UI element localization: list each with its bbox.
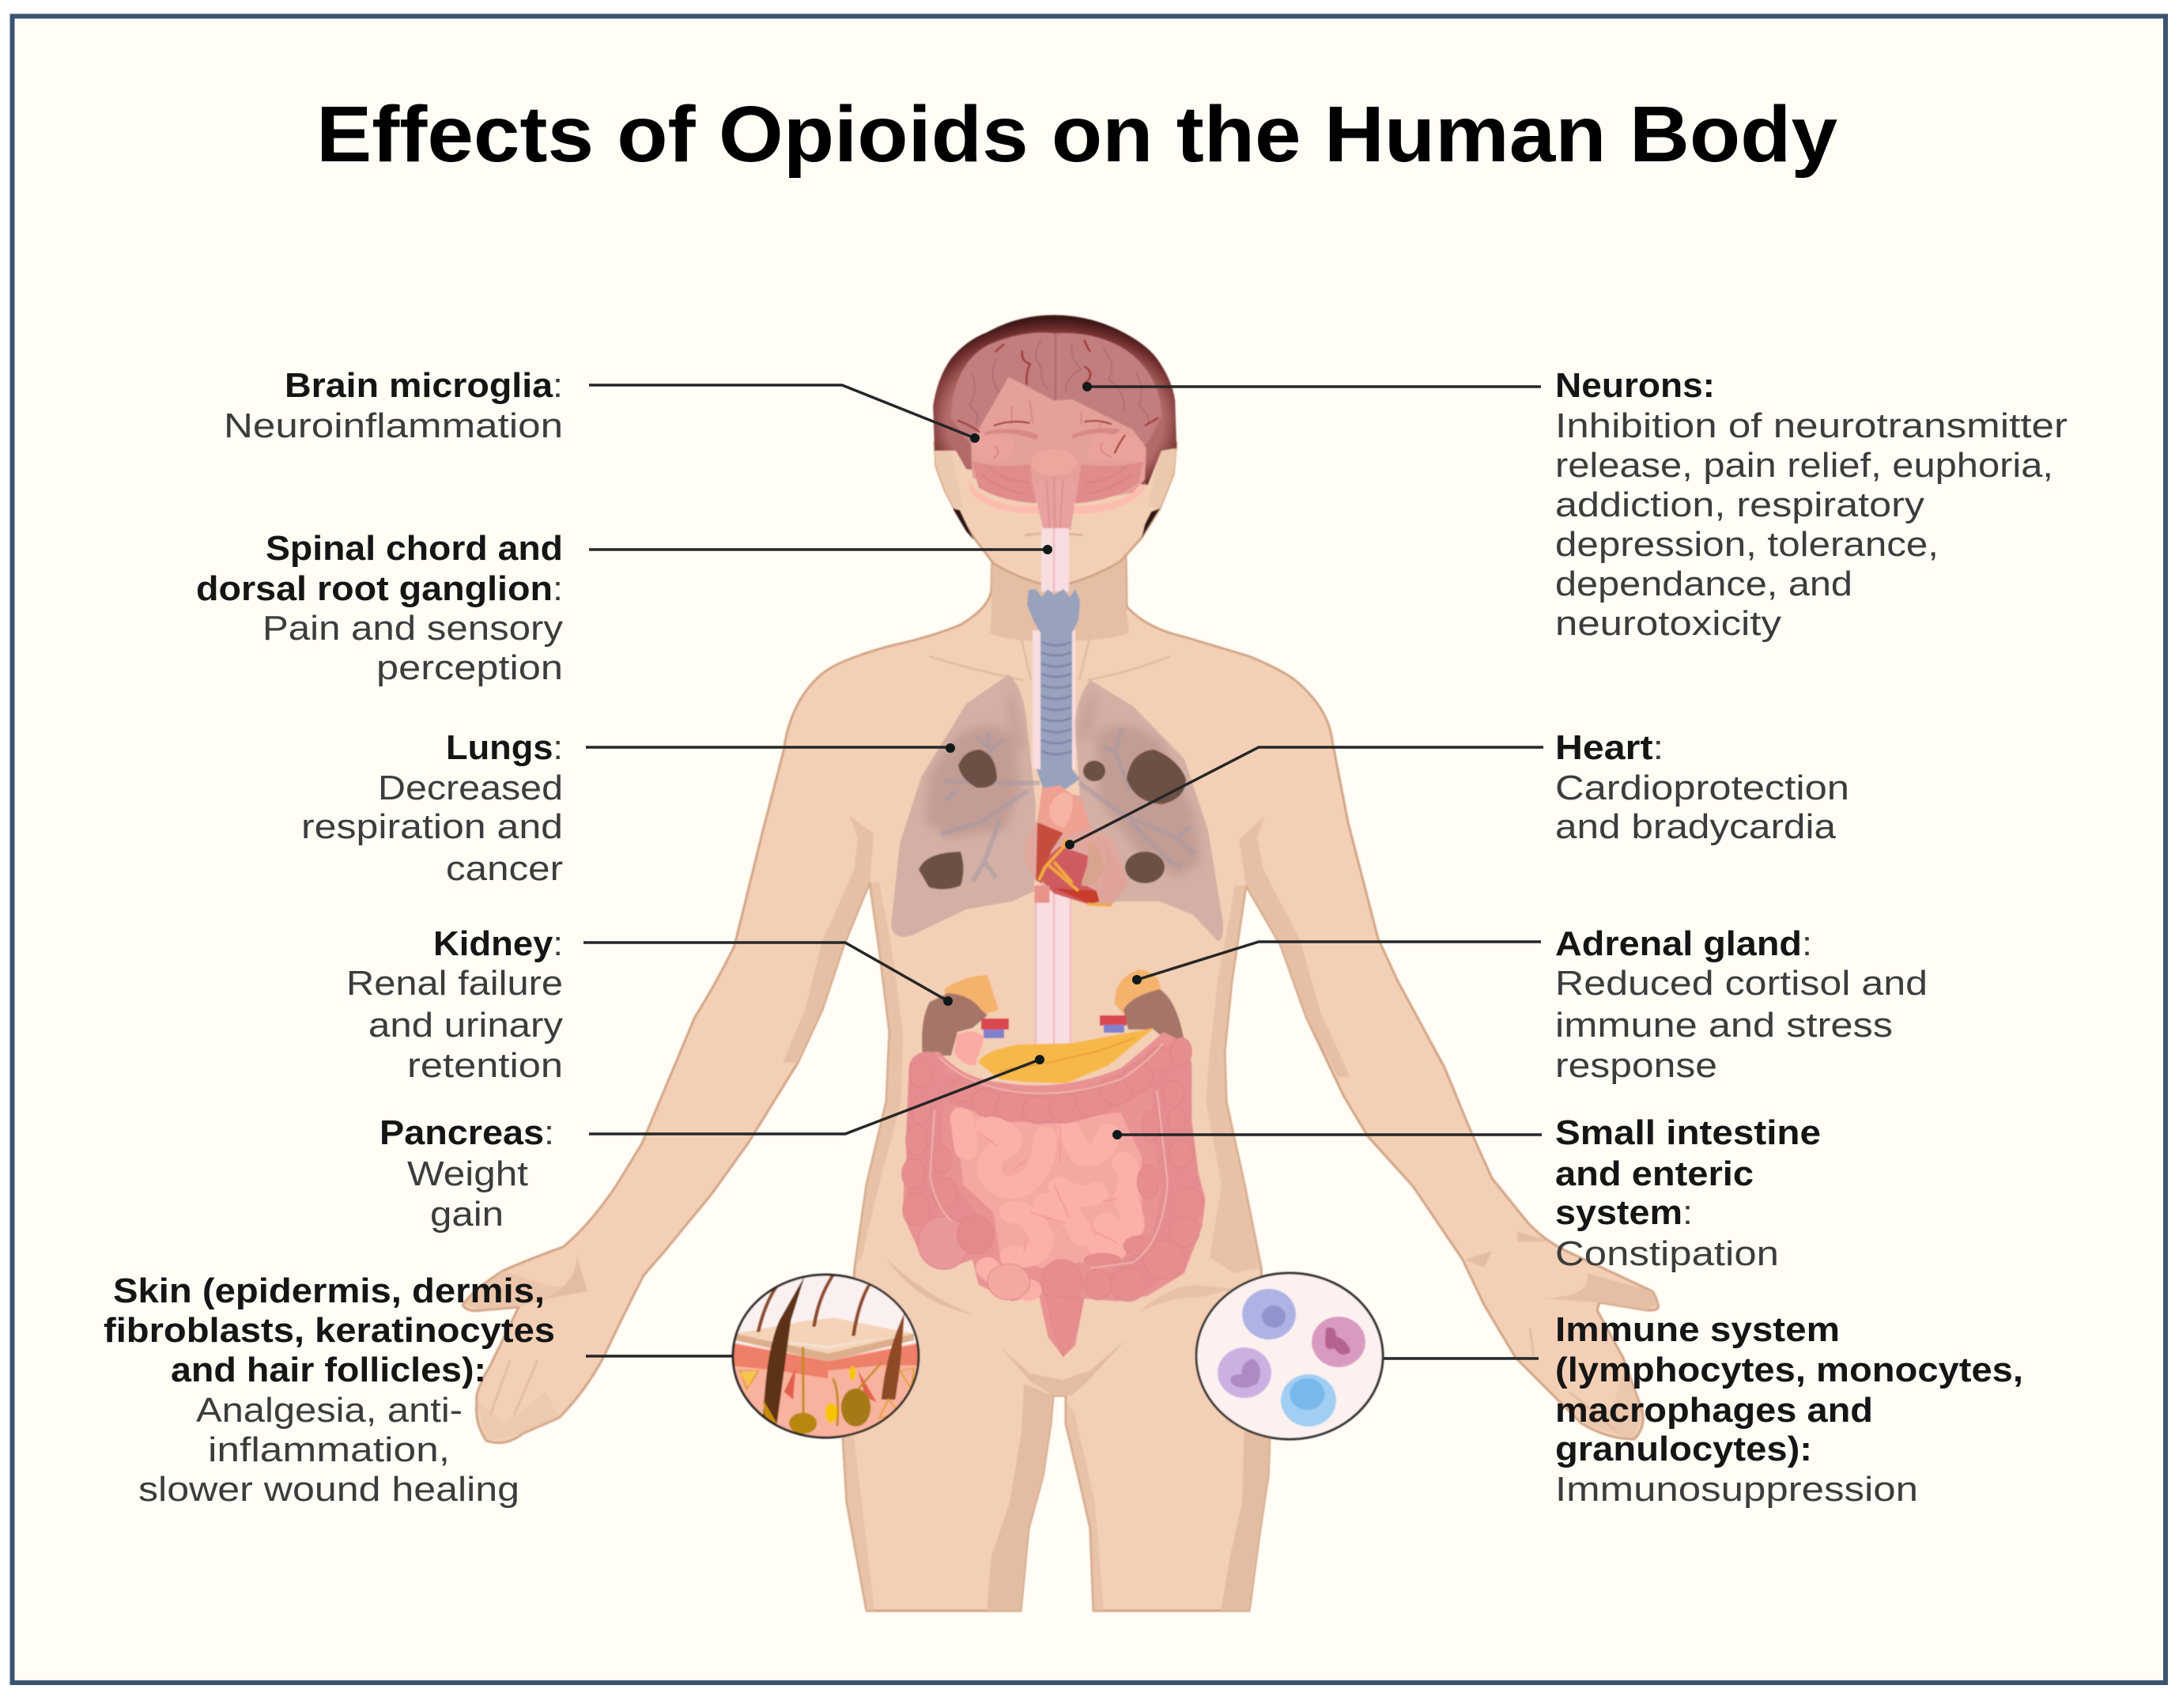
label: spinal chord: dorsal root ganglion : [196,569,563,608]
trachea [1027,589,1080,791]
label: brain microglia: Brain microglia : [285,366,563,405]
label: spinal chord: Spinal chord and [266,529,563,568]
label: skin: inflammation, [208,1430,450,1469]
colon base [903,1032,1206,1357]
label: neurons: depression, tolerance, [1555,525,1939,564]
label: skin [104,1272,555,1509]
body shading [463,555,1658,1611]
brain and hair [933,315,1176,530]
label: brain microglia: Neuroinflammation [224,406,563,445]
duodenum [954,1031,984,1065]
leader: pancreas [589,1055,1044,1134]
adrenal left [945,975,999,1016]
pancreas [979,1028,1154,1083]
label: heart: and bradycardia [1555,807,1837,846]
leader: kidney [583,943,953,1006]
label: lungs [301,728,563,888]
label: neurons: addiction, respiratory [1555,486,1924,524]
label: kidney: retention [407,1046,563,1085]
granulocyte [1312,1317,1365,1367]
label: lungs: Lungs: [446,728,563,767]
heart [1024,785,1128,905]
label: neurons: release, pain relief, euphoria, [1555,446,2053,485]
small intestine base [954,1107,1142,1268]
lymphocyte [1242,1289,1296,1340]
leader lines and dots [583,382,1543,1358]
adrenal right [1115,969,1161,1014]
blue cell [1281,1374,1336,1426]
inner lung shading [925,688,1202,878]
temporal and cerebellar lobes [972,461,1036,504]
inset: skin cross-section [728,1275,923,1442]
leader: small intestine [1112,1130,1542,1139]
left lung [891,675,1036,937]
label: pancreas: gain [430,1195,504,1234]
label: pancreas: Pancreas : [380,1113,554,1152]
human body illustration [463,315,1658,1611]
monocyte [1218,1347,1271,1398]
sideburns [953,508,974,540]
label: immune system: Immunosuppression [1555,1470,1918,1509]
label: spinal chord: perception [376,648,563,687]
spinal cord [1033,528,1075,1060]
label: adrenal gland: Reduced cortisol and [1555,964,1928,1003]
kidney left [922,993,988,1056]
label: skin: fibroblasts, keratinocytes [104,1311,555,1350]
label: neurons: neurotoxicity [1555,604,1781,643]
label: skin: slower wound healing [138,1470,519,1509]
label: kidney [346,924,563,1085]
clavicle and finger lines [490,633,1617,1431]
label: adrenal gland: response [1555,1046,1717,1085]
renal vessels [981,1018,1009,1030]
leader: lungs [586,743,955,753]
label: neurons: Neurons: [1555,366,1715,405]
label: lungs: cancer [446,849,563,888]
label: immune system [1555,1310,2023,1509]
label: brain microglia [224,366,563,445]
intestines [902,1028,1206,1357]
leader: heart [1065,747,1543,849]
label: skin: and hair follicles): [171,1351,486,1389]
bronchial trees [941,727,1194,882]
kidney right [1123,989,1184,1056]
hip creases [885,1256,976,1315]
leader: spinal cord [589,545,1052,554]
lungs [891,675,1223,941]
label: spinal chord: Pain and sensory [262,609,563,648]
label: adrenal gland [1555,924,1928,1085]
label: lungs: respiration and [301,807,563,846]
label: heart: Cardioprotection [1555,769,1849,807]
light wedge of lower brain [971,377,1146,502]
small intestine folds [979,1127,1118,1251]
midline [1054,334,1058,401]
wrist and thumb folds [1516,1231,1550,1241]
label: small intestine [1555,1113,1821,1273]
gyri lines [969,340,1149,425]
label: immune system: Immune system [1555,1310,1840,1349]
colon lumen line [930,1043,1168,1268]
small intestine loops [961,1118,1133,1290]
label: neurons: dependance, and [1555,565,1852,603]
label: spinal chord [196,529,563,687]
lower glow [969,482,1145,514]
label: skin: Skin (epidermis, dermis, [113,1272,545,1310]
label: kidney: Kidney: [433,924,563,963]
tumours [919,750,1186,890]
upper cerebrum [950,333,1161,459]
label: skin: Analgesia, anti- [196,1391,463,1430]
label: pancreas: Weight [407,1154,528,1193]
label: neurons [1555,366,2068,643]
leader: immune system [1384,1357,1539,1360]
label: immune system: macrophages and [1555,1391,1873,1430]
label: immune system: (lymphocytes, monocytes, [1555,1351,2023,1389]
label: heart: Heart : [1555,728,1664,767]
leader: adrenal gland [1132,942,1541,984]
label: small intestine: system: [1555,1193,1693,1232]
midbrain [1031,449,1077,476]
leader: brain microglia [589,385,980,443]
label: small intestine: Small intestine [1555,1113,1821,1152]
leader: skin [586,1355,733,1358]
kidneys and adrenal glands [922,969,1184,1056]
label: small intestine: and enteric [1555,1154,1754,1193]
colon bands [924,1060,1181,1282]
label: adrenal gland: Adrenal gland : [1555,924,1812,963]
blood vessels [957,340,1158,453]
leader: neurons [1082,382,1541,391]
label: kidney: and urinary [368,1006,563,1045]
face and ears [935,443,1176,587]
label: small intestine: Constipation [1555,1234,1779,1273]
label: pancreas [380,1113,554,1234]
brain stem [1031,480,1078,530]
colon lobes [902,1037,1204,1357]
label: adrenal gland: immune and stress [1555,1006,1893,1045]
body silhouette [463,554,1658,1611]
label: immune system: granulocytes): [1555,1430,1812,1468]
label: lungs: Decreased [378,769,563,807]
title: Effects of Opioids on the Human Body [316,90,1837,179]
right lung [1075,680,1223,941]
groin crease [999,1338,1127,1396]
inset: immune cells [1196,1273,1383,1439]
label: heart [1555,728,1849,846]
hair cap [933,315,1176,485]
label: neurons: Inhibition of neurotransmitter [1555,406,2068,445]
nose shadow [1025,533,1083,535]
label: kidney: Renal failure [346,964,563,1003]
